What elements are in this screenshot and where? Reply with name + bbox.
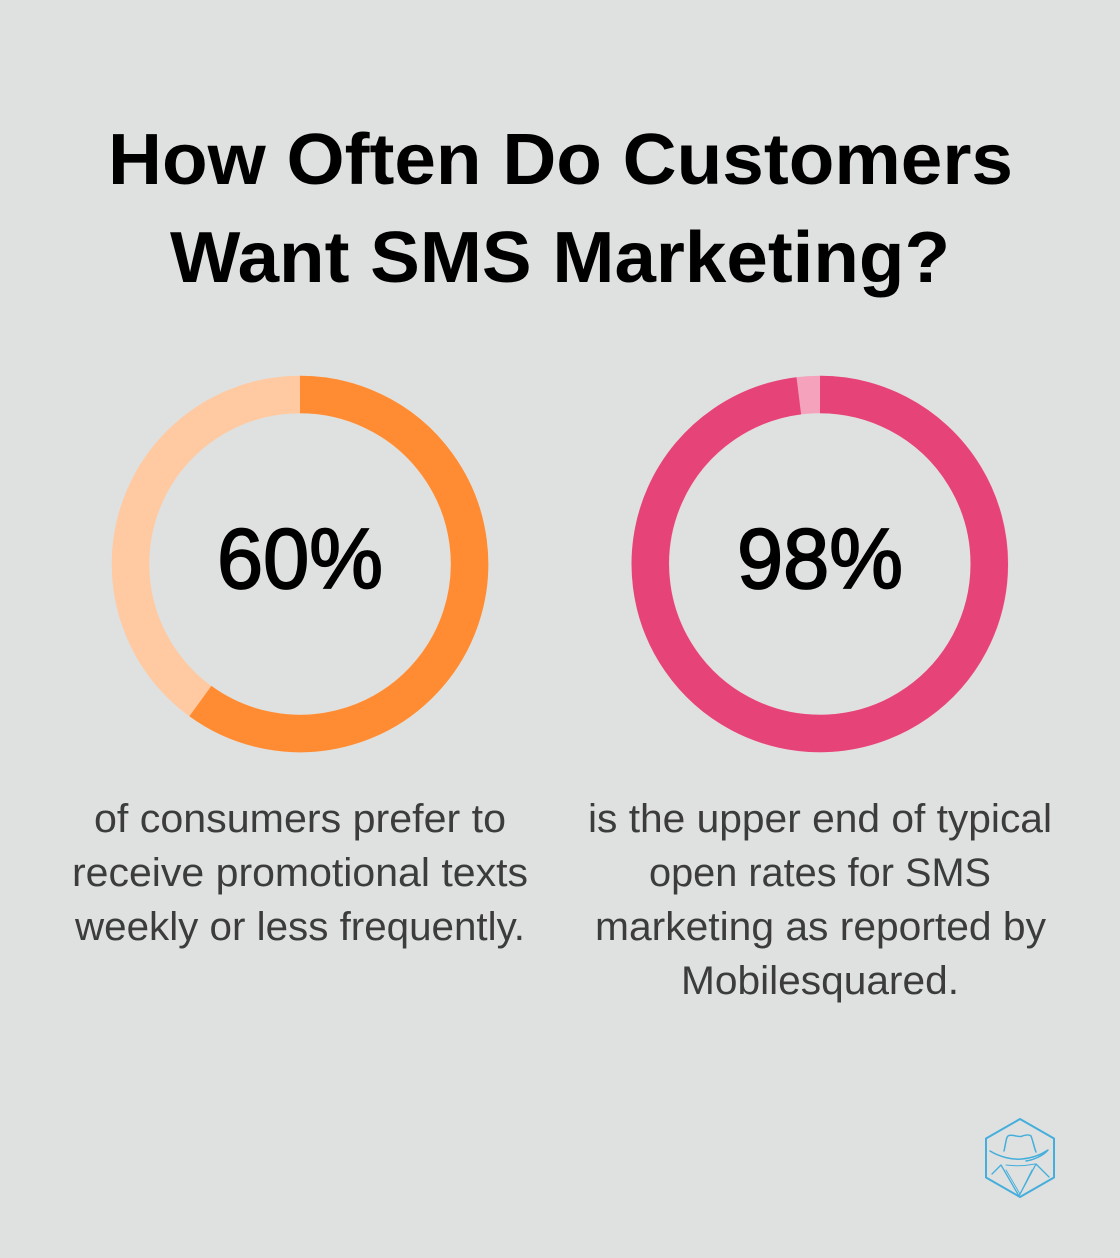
icon: logo, spy in hexagon [986, 1119, 1054, 1197]
value: 60%: 60% [217, 512, 383, 607]
caption: 60%: of consumers prefer to [94, 797, 506, 841]
donut chart: 60% [130, 394, 470, 734]
caption: 98%: Mobilesquared. [681, 959, 959, 1003]
value: 98%: 98% [737, 512, 903, 607]
caption: 98%: marketing as reported by [595, 905, 1046, 949]
caption: 60%: receive promotional texts [72, 851, 528, 895]
caption: 98%: is the upper end of typical [588, 797, 1052, 841]
title: Want SMS Marketing? [170, 218, 950, 298]
caption: 60% [72, 797, 528, 949]
title [108, 120, 1013, 298]
caption: 98% [588, 797, 1052, 1003]
donut chart: 98% [650, 394, 990, 734]
caption: 98%: open rates for SMS [649, 851, 991, 895]
caption: 60%: weekly or less frequently. [74, 905, 525, 949]
title: How Often Do Customers [108, 120, 1013, 200]
